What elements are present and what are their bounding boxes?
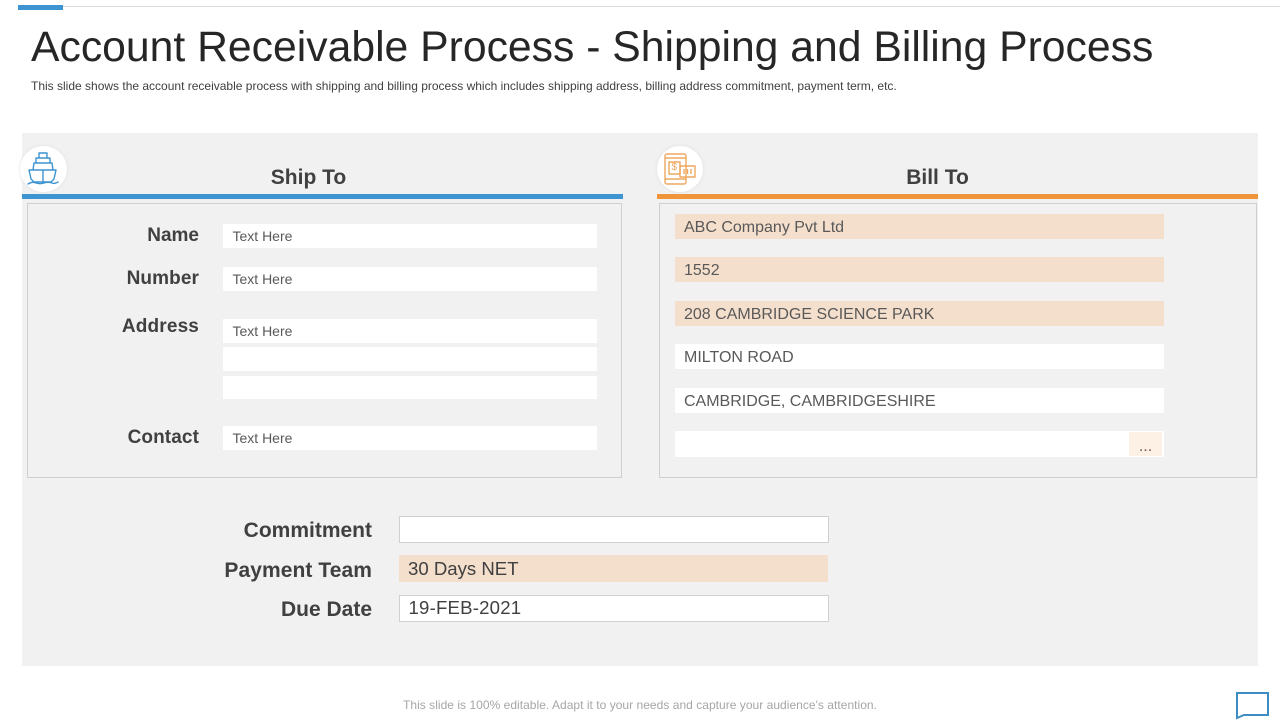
payment team label: Payment Team xyxy=(224,559,372,582)
ellipsis cell: ... xyxy=(1139,438,1152,455)
top accent rule xyxy=(18,6,1280,7)
main panel xyxy=(22,133,1258,666)
due date label: Due Date xyxy=(281,598,372,621)
number field: Text Here xyxy=(232,271,292,287)
bill number: 1552 xyxy=(684,262,720,279)
ship to heading bar xyxy=(22,194,623,199)
address field 1: Text Here xyxy=(232,323,292,339)
dollar sign: $ xyxy=(672,162,677,173)
title: Account Receivable Process - Shipping and Billing Process xyxy=(31,23,1153,71)
panel: ship to box xyxy=(27,203,622,478)
name field xyxy=(223,224,597,248)
ship to heading: Ship To xyxy=(271,166,346,189)
address field 1 xyxy=(223,319,597,343)
contact label: Contact xyxy=(128,427,199,448)
footer note: This slide is 100% editable. Adapt it to your needs and capture your audience's attention. xyxy=(403,698,877,712)
bill address 3 xyxy=(675,388,1164,413)
bill company: ABC Company Pvt Ltd xyxy=(684,219,844,236)
icon: ship xyxy=(20,146,67,192)
name field: Text Here xyxy=(232,228,292,244)
bill address 3: CAMBRIDGE, CAMBRIDGESHIRE xyxy=(684,393,936,410)
payment team field: 30 Days NET xyxy=(408,558,519,579)
bill to heading bar xyxy=(657,194,1258,199)
due date field xyxy=(399,595,829,622)
bill to heading: Bill To xyxy=(906,166,969,189)
address field 2 xyxy=(223,347,597,371)
address field 3 xyxy=(223,376,597,399)
icon: speech bubble xyxy=(1236,692,1269,720)
commitment label: Commitment xyxy=(244,519,372,542)
commitment field xyxy=(399,516,829,543)
icon: phone and ticket xyxy=(657,146,703,192)
bill address 2: MILTON ROAD xyxy=(684,349,794,366)
bill address 2 xyxy=(675,344,1164,369)
due date field: 19-FEB-2021 xyxy=(408,597,521,618)
top accent tab xyxy=(18,5,63,10)
name label: Name xyxy=(147,225,199,246)
number field xyxy=(223,267,597,291)
contact field: Text Here xyxy=(232,430,292,446)
ellipsis cell xyxy=(1129,432,1162,456)
address label: Address xyxy=(122,316,199,337)
bill address 4 xyxy=(675,431,1164,457)
number label: Number xyxy=(127,268,199,289)
bill company xyxy=(675,214,1164,239)
payment team field xyxy=(399,555,828,582)
subtitle: This slide shows the account receivable process with shipping and billing process which includes shipping address, billing address commitment, payment term, etc. xyxy=(31,79,897,93)
panel: bill to box xyxy=(659,203,1257,478)
bill address 1: 208 CAMBRIDGE SCIENCE PARK xyxy=(684,306,934,323)
bill address 1 xyxy=(675,301,1164,326)
bill number xyxy=(675,257,1164,282)
contact field xyxy=(223,426,597,450)
